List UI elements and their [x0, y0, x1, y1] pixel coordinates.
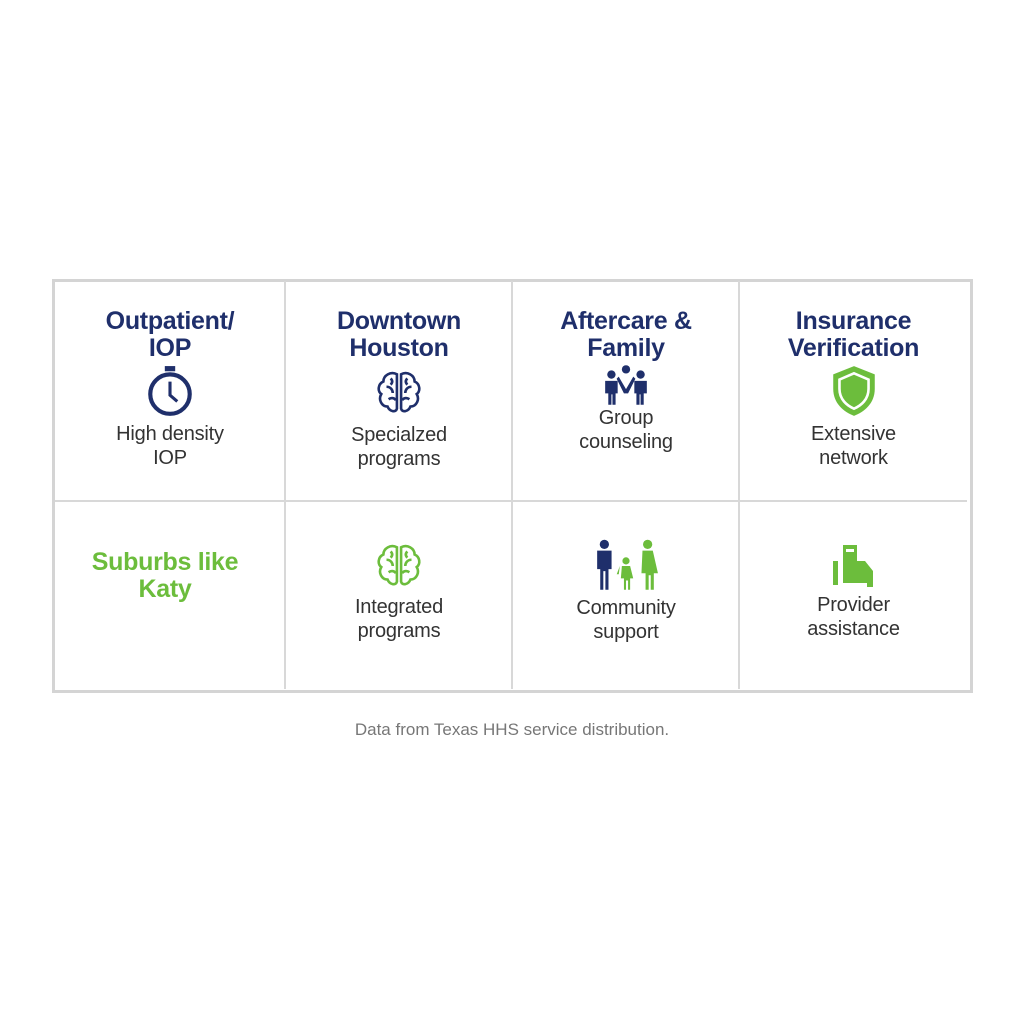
text	[116, 423, 224, 469]
grid panel	[52, 279, 973, 693]
text	[811, 423, 896, 469]
cell: Community support	[576, 540, 676, 643]
text: IOP	[153, 447, 187, 469]
cell: Integrated programs	[355, 544, 443, 642]
title	[560, 307, 692, 362]
text: Specialzed	[351, 424, 447, 446]
icon: family	[597, 540, 658, 590]
icon: group	[605, 365, 647, 405]
text: programs	[358, 620, 440, 642]
title: Downtown	[337, 307, 461, 335]
cell: Aftercare & Family	[560, 307, 692, 453]
text	[355, 596, 443, 642]
title: Houston	[349, 334, 449, 362]
icon: shield	[833, 366, 875, 416]
text: High density	[116, 423, 224, 445]
text	[579, 407, 673, 453]
title: Outpatient/	[106, 307, 234, 335]
footnote: Data from Texas HHS service distribution.	[355, 720, 669, 739]
cell: Suburbs like Katy: Suburbs like	[92, 548, 238, 576]
title: IOP	[149, 334, 191, 362]
text: support	[593, 621, 659, 643]
cell: Provider assistance	[807, 545, 900, 640]
title	[788, 307, 919, 362]
cell: Insurance Verification	[788, 307, 919, 469]
text: Provider	[817, 594, 890, 616]
title: Insurance	[796, 307, 911, 335]
text: assistance	[807, 618, 900, 640]
title: Verification	[788, 334, 919, 362]
text	[576, 597, 676, 643]
text	[351, 424, 447, 470]
title	[337, 307, 461, 362]
text: Integrated	[355, 596, 443, 618]
text: Extensive	[811, 423, 896, 445]
text: Community	[576, 597, 676, 619]
text: programs	[358, 448, 440, 470]
cell: Outpatient/IOP	[106, 307, 234, 469]
text: counseling	[579, 431, 673, 453]
title: Family	[587, 334, 665, 362]
icon: stopwatch	[148, 366, 192, 416]
cell: Suburbs like Katy	[92, 548, 238, 603]
cell: Suburbs like Katy: Katy	[138, 575, 192, 603]
icon: brain	[377, 372, 421, 412]
title: Aftercare &	[560, 307, 692, 335]
icon: brain green	[377, 544, 421, 586]
text: Group	[599, 407, 653, 429]
text: network	[819, 447, 888, 469]
cell: Downtown Houston	[337, 307, 461, 470]
text	[807, 594, 900, 640]
icon: desk/printer	[833, 545, 873, 587]
title	[106, 307, 234, 362]
